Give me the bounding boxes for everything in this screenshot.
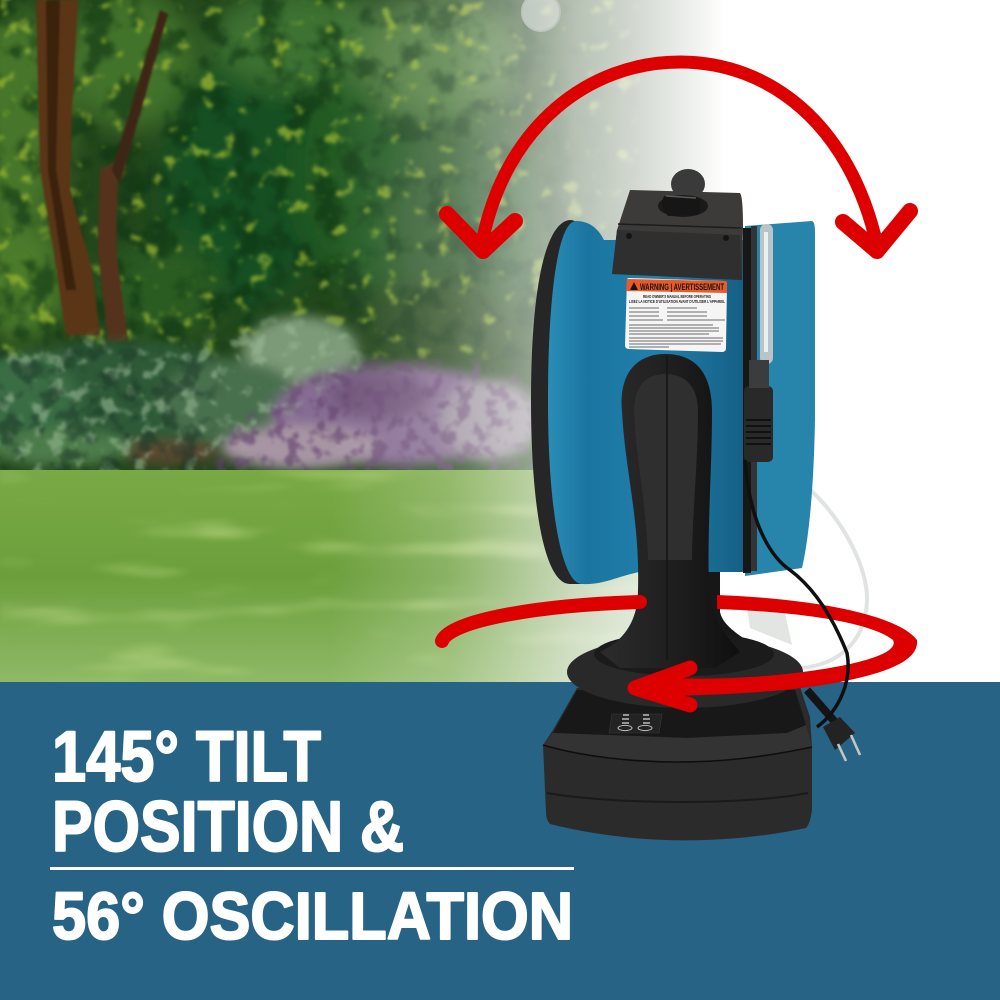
- fan product photo: [531, 169, 867, 840]
- line: position and: POSITION &: [52, 788, 404, 867]
- control dial: [658, 195, 708, 217]
- sunlit leaves: [0, 0, 640, 360]
- front black ring: [531, 220, 590, 584]
- power cord: [745, 460, 848, 727]
- line: 56° oscillation: 56° OSCILLATION: [52, 879, 573, 954]
- divider: [50, 867, 574, 870]
- line: 145° tilt: 145° TILT: [52, 718, 321, 797]
- rear blue shroud: [745, 221, 815, 576]
- power plug: [807, 690, 860, 761]
- leaf texture: [0, 0, 640, 360]
- tilt arm rear bracket: [704, 572, 762, 652]
- garden photo background: [0, 0, 1000, 682]
- tree foliage: [0, 0, 550, 360]
- clear tube along body: [760, 224, 773, 364]
- warning label: [625, 278, 727, 352]
- tilt arm: [600, 354, 740, 668]
- purple leaf texture: [215, 360, 530, 480]
- rating label: [747, 608, 792, 645]
- oscillation arrowhead: [635, 668, 690, 705]
- warning label: READ OWNER'S MANUAL BEFORE OPERATING: [643, 294, 711, 299]
- warning label: WARNING | AVERTISSEMENT: [640, 282, 724, 293]
- shrub border: [0, 316, 358, 466]
- connector: [744, 360, 773, 462]
- tree trunks: [36, 0, 168, 342]
- tilt arrow: [447, 62, 910, 251]
- purple flowering shrub: [220, 365, 540, 469]
- control box: [612, 190, 743, 280]
- clear water tube: [800, 485, 867, 668]
- rear dark gap: [743, 228, 751, 573]
- oscillation arrow: rear arc and sweep, right part: [635, 595, 917, 696]
- oscillation arrow: rear arc, left part: [442, 602, 640, 641]
- soap bubble: [522, 0, 560, 31]
- base body: [543, 687, 812, 840]
- turntable disc: [567, 632, 803, 708]
- white fade: [330, 0, 725, 682]
- control panel decal: [609, 714, 662, 733]
- top handle knob: [671, 169, 705, 199]
- front blue shroud: [548, 221, 744, 584]
- teal footer band: [0, 682, 1000, 1000]
- warning label: LISEZ LA NOTICE D'UTILISATION AVANT D'UTILISER L'APPAREIL: [629, 299, 725, 304]
- headline text: [52, 718, 573, 954]
- lawn: [0, 470, 760, 682]
- shrub leaf textures: [0, 319, 365, 490]
